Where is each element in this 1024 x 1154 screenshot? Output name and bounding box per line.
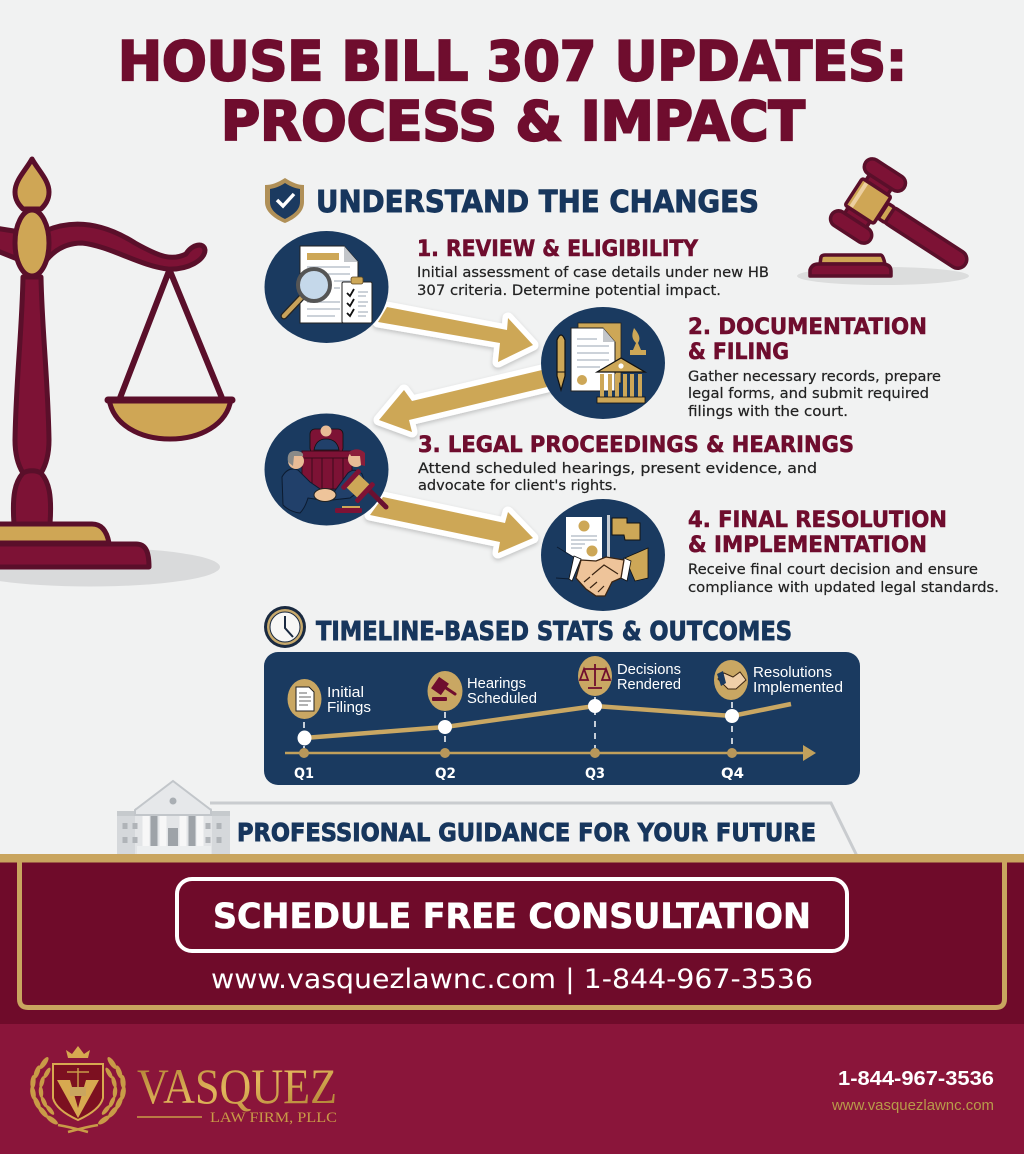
banner: professional guidance: PROFESSIONAL GUIDANCE FOR YOUR FUTURE: [237, 818, 816, 847]
call to action panel: [0, 854, 1024, 1024]
footer contact: [831, 1068, 994, 1114]
footer contact: 1-844-967-3536: [838, 1068, 994, 1090]
panel: timeline chart: [264, 652, 860, 785]
milestone: resolutions implemented: Resolutions: [753, 665, 832, 681]
step 3 text: advocate for client's rights.: [418, 478, 617, 494]
quarter labels: Q4: [721, 766, 744, 782]
step 1 icon: document review: [264, 231, 388, 343]
arrow: step 3 to step 4: [370, 497, 533, 553]
section heading: understand the changes: [265, 178, 759, 223]
footer contact: www.vasquezlawnc.com: [831, 1098, 994, 1114]
milestone: initial filings: Filings: [327, 700, 371, 716]
step 4 text: compliance with updated legal standards.: [688, 580, 999, 596]
footer: [0, 1024, 1024, 1154]
step 3 icon: courtroom hearing: [264, 414, 388, 526]
title: PROCESS & IMPACT: [221, 90, 805, 153]
button: schedule free consultation: SCHEDULE FREE CONSULTATION: [213, 897, 811, 937]
step 3 text: 3. LEGAL PROCEEDINGS & HEARINGS: [418, 433, 854, 458]
step 2 text: & FILING: [688, 340, 789, 365]
laurel wreath right: [68, 1056, 127, 1132]
timeline heading: [264, 606, 792, 648]
step 2 text: filings with the court.: [688, 404, 848, 420]
step 4 text: 4. FINAL RESOLUTION: [688, 508, 947, 533]
step 1 text: 1. REVIEW & ELIGIBILITY: [417, 237, 699, 262]
icon: courthouse: [117, 781, 230, 854]
button: schedule free consultation: [177, 879, 847, 951]
icon: scales of justice: [0, 159, 232, 586]
laurel wreath left: [29, 1056, 88, 1132]
chart axis: [285, 697, 816, 761]
logo: vasquez law firm: [29, 1046, 337, 1132]
shield: [53, 1064, 103, 1120]
title: [118, 30, 907, 153]
wordmark: VASQUEZ: [137, 1058, 337, 1114]
milestone: resolutions implemented: Implemented: [753, 680, 843, 696]
quarter labels: Q1: [294, 766, 314, 782]
contact line: www.vasquezlawnc.com | 1-844-967-3536: [211, 964, 813, 995]
step 2 text: Gather necessary records, prepare: [688, 369, 941, 385]
icon: gavel: [797, 156, 987, 297]
step 4 text: Receive final court decision and ensure: [688, 562, 978, 578]
milestone: decisions rendered: Decisions: [617, 662, 681, 678]
milestone: hearings scheduled: Hearings: [467, 676, 526, 692]
milestone: initial filings: Initial: [327, 685, 364, 701]
step 4 text: [688, 508, 999, 596]
icon: shield check: [265, 178, 304, 223]
section heading: understand the changes: UNDERSTAND THE CHANGES: [316, 185, 759, 220]
arrow: step 2 to step 3: [379, 370, 547, 432]
step 4 text: & IMPLEMENTATION: [688, 533, 927, 558]
step 2 text: 2. DOCUMENTATION: [688, 315, 927, 340]
step 2 text: [688, 315, 941, 420]
step 3 text: [418, 433, 854, 494]
milestone: hearings scheduled: Scheduled: [467, 691, 537, 707]
milestone: resolutions implemented: [714, 660, 843, 700]
step 1 text: [417, 237, 769, 299]
banner: professional guidance: [117, 781, 857, 856]
icon: clock: [264, 606, 306, 648]
step 2 text: legal forms, and submit required: [688, 386, 929, 402]
title: HOUSE BILL 307 UPDATES:: [118, 30, 907, 93]
quarter labels: Q2: [435, 766, 456, 782]
quarter labels: Q3: [585, 766, 605, 782]
step 3 text: Attend scheduled hearings, present evidence, and: [418, 461, 817, 477]
step 4 icon: handshake resolution: [541, 499, 665, 611]
crown: [66, 1046, 90, 1058]
milestone: hearings scheduled: [428, 671, 537, 711]
quarter labels: [294, 766, 744, 782]
step 2 icon: filing and courthouse: [541, 307, 665, 419]
milestone: decisions rendered: Rendered: [617, 677, 681, 693]
milestone: decisions rendered: [578, 656, 681, 696]
milestone: initial filings: [288, 679, 371, 719]
wordmark: LAW FIRM, PLLC: [210, 1110, 337, 1126]
step 1 text: 307 criteria. Determine potential impact.: [417, 283, 721, 299]
trend line: [298, 699, 791, 746]
arrow: step 1 to step 2: [378, 307, 533, 362]
timeline heading: TIMELINE-BASED STATS & OUTCOMES: [316, 617, 792, 647]
step 1 text: Initial assessment of case details under new HB: [417, 265, 769, 281]
